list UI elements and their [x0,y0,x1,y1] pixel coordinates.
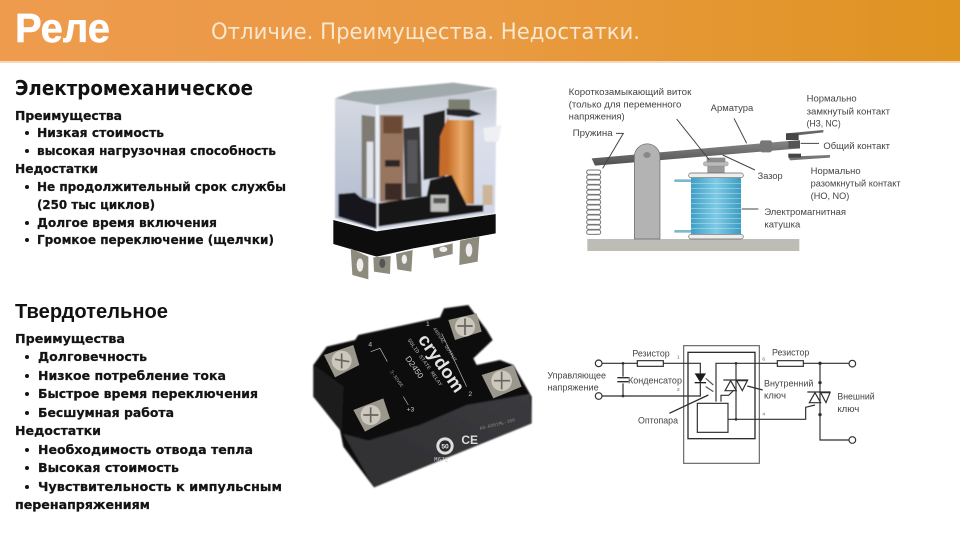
photo diode arrows [706,378,713,392]
circuit labels: Внешний [837,392,875,402]
advantages list: высокая нагрузочная способность [37,143,276,158]
controller box [697,403,728,432]
body silhouette [313,305,532,487]
subtitle: Отличие. Преимущества. Недостатки. [211,20,640,45]
photo: solid state relay [313,305,532,487]
diagram labels: замкнутый контакт [807,106,890,116]
brand marking: 3-32VDC [388,369,405,389]
junction dots [622,362,822,421]
armature lever [592,140,800,166]
diode [695,373,706,383]
pivot post [634,144,660,239]
photo: solid state relay: 4 [368,342,372,349]
circuit labels: Резистор [632,349,670,359]
disadvantages list: Не продолжительный срок службы [37,179,286,194]
advantages list: Преимущества [15,331,125,346]
terminals [595,360,602,367]
advantages list: Низкая стоимость [37,125,164,140]
circuit labels: 4 [762,411,765,416]
advantages list: Преимущества [15,108,122,123]
heading: solid state: Твердотельное [15,301,168,323]
diagram labels: (НЗ, NC) [807,119,841,129]
disadvantages list: Высокая стоимость [38,460,179,475]
diagram labels: (только для переменного [569,99,681,109]
diagram labels: катушка [764,220,800,230]
circuit labels: 1 [677,354,680,359]
heading: electromechanical: Электромеханическое [15,76,253,100]
disadvantages list: Недостатки [15,423,101,438]
input resistor [637,361,663,366]
circuit labels: ключ [837,404,860,414]
front face [343,394,532,487]
leader lines [603,118,819,209]
disadvantages list: Чувствительность к импульсным [38,479,282,494]
photo: solid state relay: CE [461,433,478,447]
photo: solid state relay: 1 [426,321,430,328]
diagram: solid state relay circuit [547,346,875,463]
inner triac [723,380,748,391]
diagram labels [569,87,901,230]
diagram labels: Электромагнитная [764,207,846,217]
disadvantages list: Громкое переключение (щелчки) [37,232,274,247]
package outline [684,346,759,463]
leader lines [669,386,763,413]
output resistor [777,361,803,366]
brand marking: SOLID STATE RELAY [406,338,444,388]
side wall highlight [313,365,343,430]
certification marks [436,437,454,455]
circuit labels: Управляющее [547,371,606,381]
photo: electromechanical relay [333,83,502,279]
diagram labels: Короткозамыкающий виток [569,87,691,97]
diagram labels: Общий контакт [823,141,890,151]
photo: solid state relay: AS-0201ML-100 [479,417,516,432]
circuit labels: напряжение [547,383,599,393]
panel: electromechanical relay text [15,76,286,247]
capacitor [617,378,629,382]
diagram labels: Нормально [811,166,861,176]
advantages list [15,331,258,420]
diagram labels: (НО, NO) [811,191,849,201]
output wiring [716,363,849,440]
panel: solid state relay text [15,301,282,512]
photo: solid state relay: M672 [434,457,449,464]
advantages list: Низкое потребление тока [38,368,226,383]
advantages list: Бесшумная работа [38,405,174,420]
disadvantages list: Необходимость отвода тепла [38,442,253,457]
base plate [587,239,799,251]
diagram labels: Арматура [711,103,753,113]
top label panel [357,322,473,423]
diagram labels: Зазор [758,171,783,181]
advantages list [15,108,276,158]
brand marking: 480VAC OUTPUT [431,326,458,363]
photo: solid state relay: 2 [468,391,472,398]
photo: solid state relay: +3 [407,407,415,414]
screw terminals [324,345,359,377]
circuit labels: Резистор [772,347,809,357]
diagram labels: напряжения) [569,112,625,122]
circuit labels [547,347,875,426]
disadvantages list: Недостатки [15,161,98,176]
spring [587,170,601,234]
circuit labels: 2 [677,387,680,392]
brand marking [388,326,469,396]
coil [674,158,743,239]
diagram labels: Пружина [573,128,613,138]
circuit labels: Внутренний [764,379,813,389]
disadvantages list [15,161,286,247]
header bar [0,0,960,63]
disadvantages list: Долгое время включения [37,215,217,230]
disadvantages list: перенапряжениям [15,497,150,512]
circuit labels: Оптопара [638,416,678,426]
circuit labels: ключ [764,391,786,401]
input wiring [602,363,700,396]
brand marking: D2450 [403,354,426,381]
disadvantages list [15,423,282,512]
circuit labels: Конденсатор [628,375,682,385]
brand marking: crydom [414,330,469,396]
advantages list: Долговечность [38,349,147,364]
diagram labels: разомкнутый контакт [811,179,901,189]
title: Реле [15,5,110,51]
contacts [786,130,830,160]
photo: solid state relay: 50 [441,444,449,451]
outer triac [807,392,831,403]
disadvantages list: (250 тыс циклов) [37,197,155,212]
advantages list: Быстрое время переключения [38,386,258,401]
diagram: electromechanical relay structure [569,87,901,251]
diagram labels: Нормально [807,94,857,104]
circuit labels: 6 [762,357,765,362]
